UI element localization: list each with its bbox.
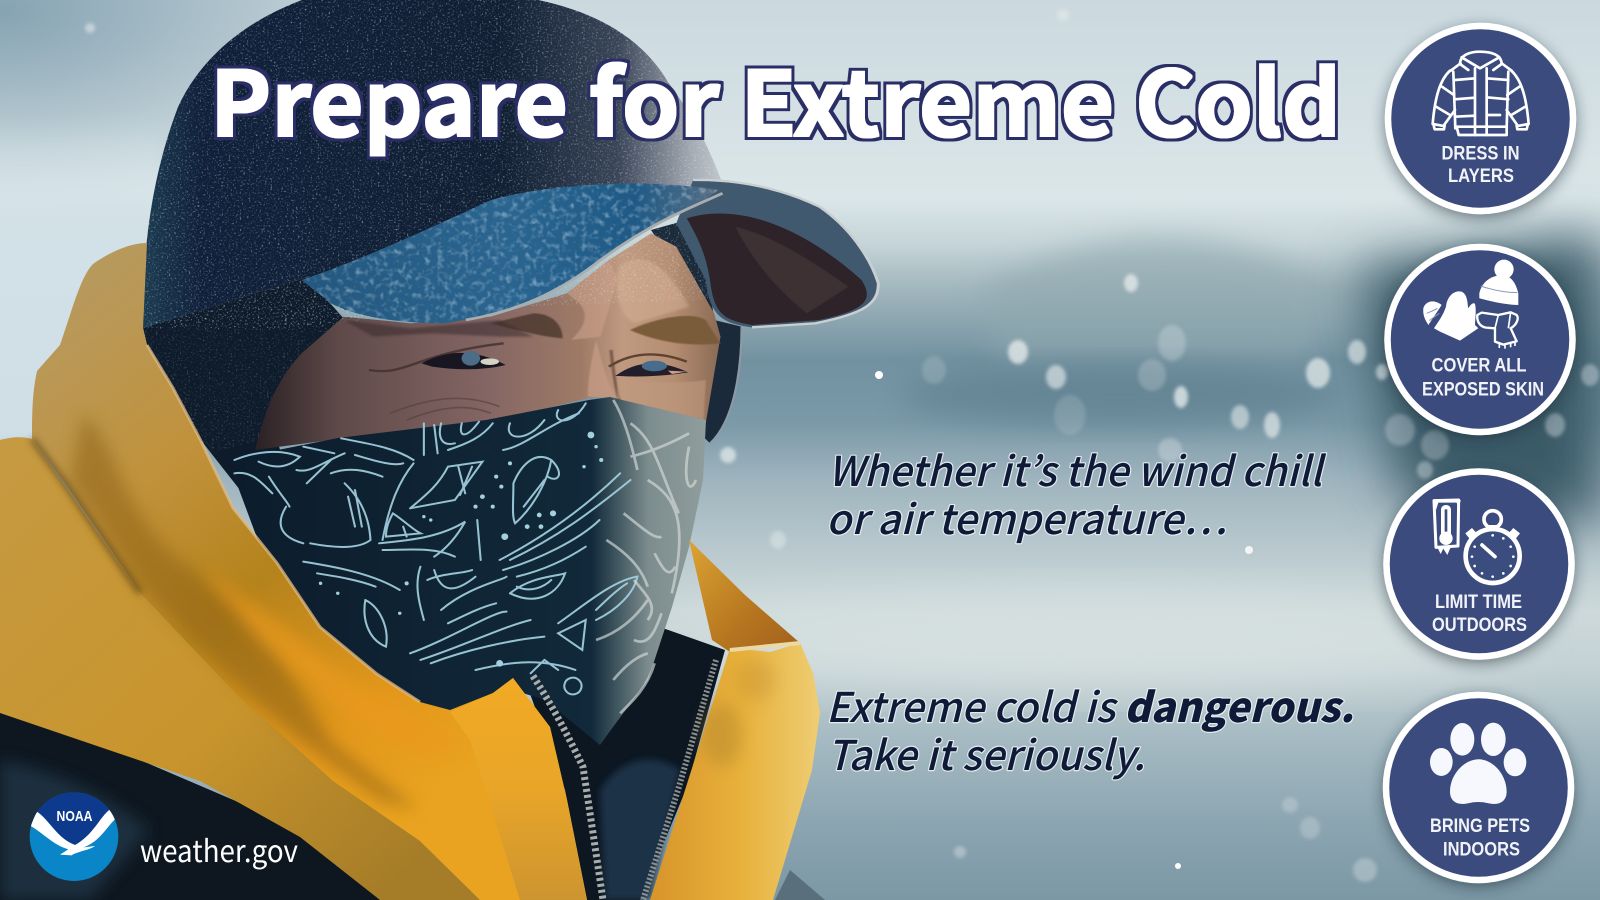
neck gaiter with pattern <box>228 397 706 745</box>
icon: paw print <box>1430 723 1526 804</box>
brim underside and rim <box>676 180 878 327</box>
label: cover all exposed skin: COVER ALL <box>1432 356 1527 377</box>
zipper <box>533 676 603 900</box>
icon: jacket <box>1433 52 1529 135</box>
coat grey sleeve bottom right <box>775 870 825 900</box>
text block: intro <box>826 438 1327 546</box>
icon: frozen thermometer and stopwatch <box>1433 500 1520 583</box>
gaiter frost pattern <box>596 400 696 713</box>
shadows and creases <box>344 320 533 337</box>
photo: man in cold-weather gear <box>0 0 878 900</box>
text block: intro: or air temperature… <box>826 486 1227 546</box>
jacket: yellow hood <box>32 243 587 900</box>
hat frost <box>140 0 740 330</box>
label: dress in layers: LAYERS <box>1448 166 1514 187</box>
text block: intro: Whether it’s the wind chill <box>828 438 1327 498</box>
icon: hat, mittens and scarf <box>1423 260 1518 349</box>
panel: bring pets indoors <box>1386 695 1571 880</box>
weather.gov link text: weather.gov <box>140 827 298 871</box>
hat brim <box>302 184 724 324</box>
left eye <box>422 353 506 369</box>
label: dress in layers: DRESS IN <box>1442 144 1520 164</box>
hat crown <box>143 0 722 328</box>
label: dress in layers <box>1442 144 1520 187</box>
panel: limit time outdoors <box>1386 472 1572 656</box>
dark lower-left shoulder <box>0 700 420 900</box>
text block: warning: Take it seriously. <box>827 722 1145 782</box>
label: bring pets indoors: BRING PETS <box>1430 816 1530 837</box>
jacket: right collar <box>643 643 820 900</box>
face <box>255 233 720 450</box>
jacket: center placket <box>450 678 587 900</box>
jacket interior and zipper opening <box>525 620 725 900</box>
hood lower band <box>143 277 343 488</box>
label: limit time outdoors <box>1432 592 1527 636</box>
text block: warning: Extreme cold is dangerous. <box>826 674 1354 734</box>
text block: warning <box>826 674 1354 782</box>
right eye <box>615 363 688 377</box>
jacket: right collar lining <box>689 540 800 652</box>
NOAA wordmark: NOAA <box>56 808 93 825</box>
panel: cover all exposed skin <box>1388 247 1572 432</box>
label: limit time outdoors: LIMIT TIME <box>1435 592 1522 613</box>
jacket: lower fold <box>0 437 480 900</box>
label: cover all exposed skin <box>1422 356 1544 401</box>
gaiter dots <box>319 432 603 667</box>
panel: dress in layers <box>1388 26 1573 211</box>
label: bring pets indoors: INDOORS <box>1443 840 1520 861</box>
title: Prepare for Extreme Cold <box>210 32 1341 162</box>
label: cover all exposed skin: EXPOSED SKIN <box>1422 380 1544 401</box>
label: limit time outdoors: OUTDOORS <box>1432 615 1527 636</box>
icon: NOAA logo <box>27 790 122 881</box>
label: bring pets indoors <box>1430 816 1530 861</box>
right ear flap <box>651 220 742 443</box>
